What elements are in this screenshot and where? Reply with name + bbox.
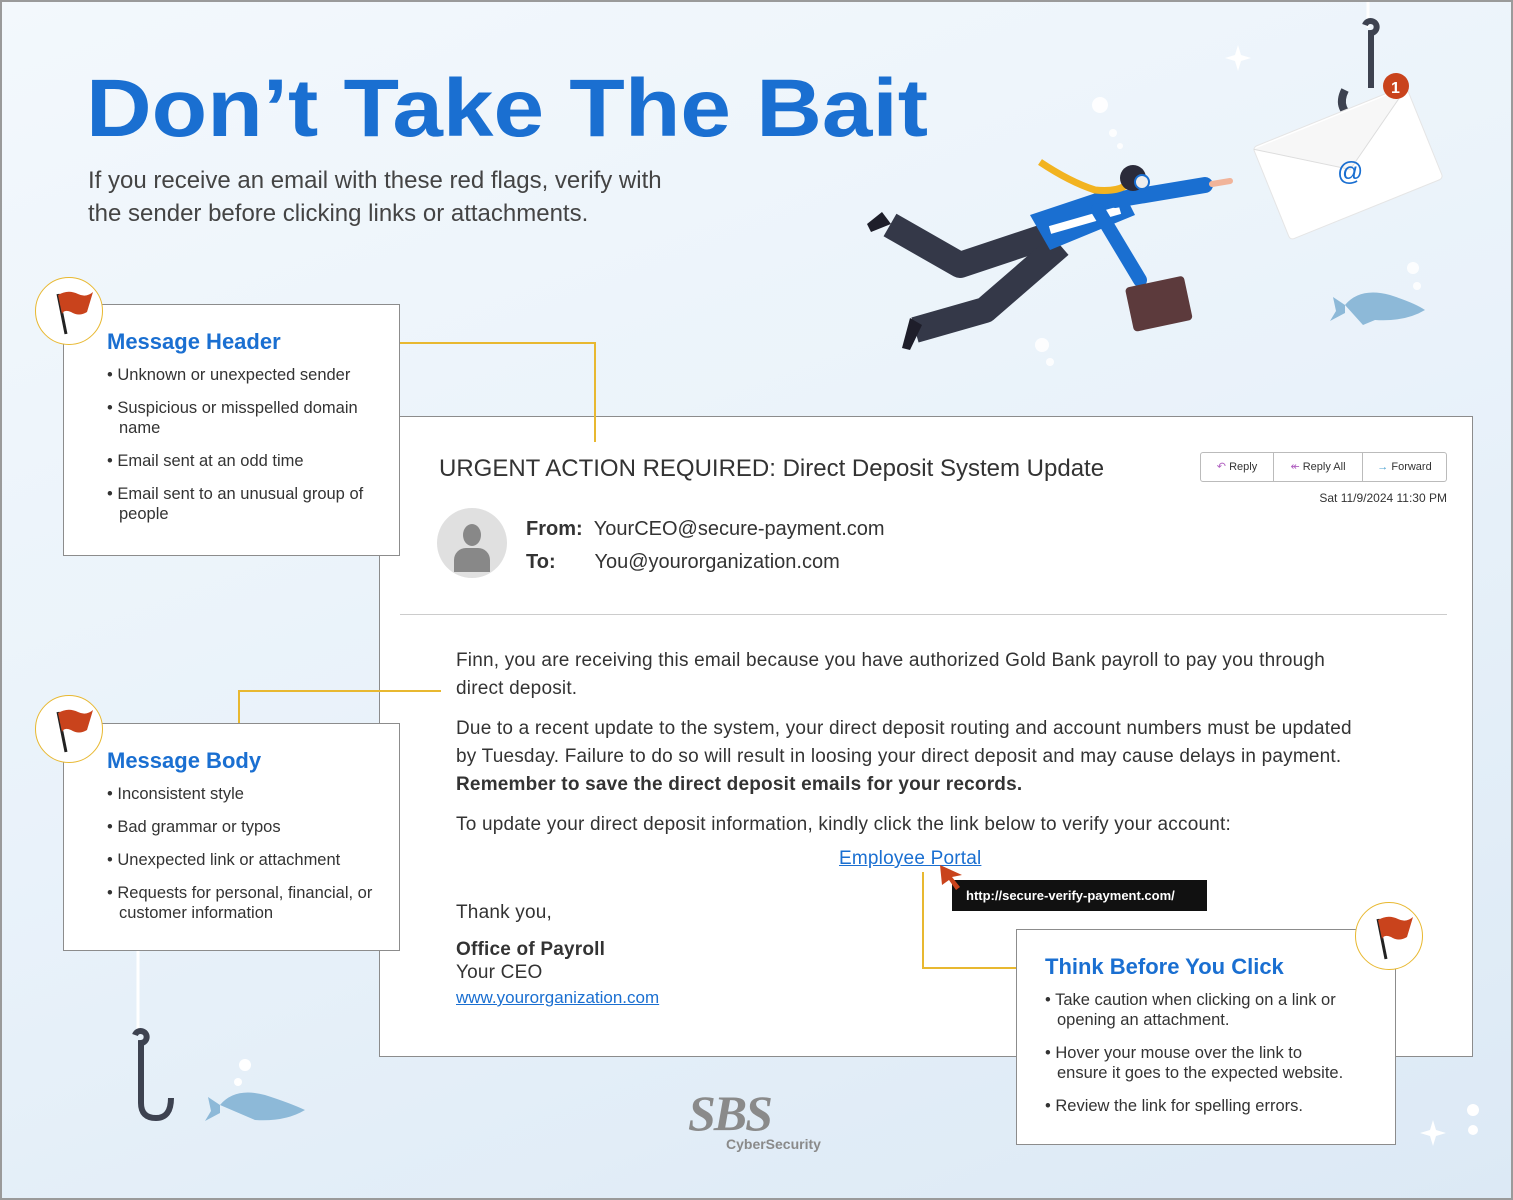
illustration: diver and hooked email: @ bbox=[1337, 156, 1363, 186]
panel: message header: Suspicious or misspelled domain name bbox=[117, 399, 358, 437]
icon: flag think bbox=[1355, 902, 1423, 970]
icon: cursor bbox=[940, 865, 962, 890]
panel: think before you click: Hover your mouse over the link to ensure it goes to the expected website. bbox=[1055, 1044, 1343, 1082]
panel: message header: Message Header bbox=[107, 329, 281, 354]
from/to bbox=[526, 518, 885, 573]
signature: Thank you, bbox=[456, 902, 552, 923]
subtitle: the sender before clicking links or attachments. bbox=[88, 200, 588, 227]
reply buttons: → Forward bbox=[1377, 461, 1432, 473]
signature: Office of Payroll bbox=[456, 939, 605, 960]
reply buttons bbox=[1200, 452, 1447, 482]
icon: avatar bbox=[437, 508, 507, 578]
reply buttons: ↞ Reply All bbox=[1290, 461, 1346, 473]
email subject: URGENT ACTION REQUIRED: Direct Deposit System Update bbox=[439, 455, 1104, 482]
signature bbox=[456, 902, 605, 960]
tooltip url bbox=[952, 880, 1207, 911]
panel: think before you click bbox=[1016, 929, 1396, 1145]
decorative sparkles bbox=[1420, 1104, 1479, 1146]
panel: email: Due to a recent update to the system, your direct deposit routing and account numbers must be updated by Tuesday. Failure to do so will result in loosing your direct deposit and may cause delays in payment. Remember to save the direct deposit emails for your records. bbox=[456, 718, 1352, 795]
reply buttons: ↶ Reply bbox=[1217, 461, 1257, 473]
panel: message body bbox=[63, 723, 400, 951]
panel: message body: Unexpected link or attachment bbox=[117, 851, 340, 869]
panel: think before you click: Review the link for spelling errors. bbox=[1055, 1097, 1303, 1115]
email body: Finn, you are receiving this email because you have authorized Gold Bank payroll to pay you through direct deposit. bbox=[456, 650, 1325, 699]
logo: SBS bbox=[688, 1085, 771, 1141]
illustration: diver and hooked email: 1 bbox=[1391, 80, 1400, 97]
panel: think before you click: Think Before You Click bbox=[1045, 954, 1284, 979]
logo bbox=[688, 1085, 821, 1152]
from/to: From: YourCEO@secure-payment.com bbox=[526, 518, 885, 540]
logo: CyberSecurity bbox=[726, 1136, 821, 1152]
panel: email: Your CEO bbox=[456, 962, 542, 983]
panel: message body: Requests for personal, financial, or customer information bbox=[117, 884, 372, 922]
link: Employee Portal bbox=[839, 848, 981, 869]
icon: flag header bbox=[35, 277, 103, 345]
panel: message header: Unknown or unexpected sender bbox=[117, 366, 350, 384]
panel: think before you click: Take caution when clicking on a link or opening an attachment. bbox=[1055, 991, 1336, 1029]
panel: message header: Email sent to an unusual group of people bbox=[117, 485, 363, 523]
panel: message body: Bad grammar or typos bbox=[117, 818, 281, 836]
subtitle bbox=[88, 167, 662, 227]
illustration: bottom hook and fish bbox=[132, 951, 305, 1121]
illustration: diver and hooked email bbox=[867, 2, 1442, 366]
tooltip url: http://secure-verify-payment.com/ bbox=[966, 888, 1175, 903]
connectors bbox=[399, 342, 595, 344]
from/to: To: You@yourorganization.com bbox=[526, 551, 840, 573]
panel: email bbox=[379, 416, 1473, 1057]
panel: email: To update your direct deposit information, kindly click the link below to verify your account: bbox=[456, 814, 1231, 835]
timestamp: Sat 11/9/2024 11:30 PM bbox=[1319, 491, 1447, 505]
panel: message header: Email sent at an odd time bbox=[117, 452, 304, 470]
subtitle: If you receive an email with these red flags, verify with bbox=[88, 167, 662, 194]
icon: flag body bbox=[35, 695, 103, 763]
title: Don’t Take The Bait bbox=[86, 63, 928, 154]
panel: message body: Inconsistent style bbox=[117, 785, 244, 803]
panel: email: www.yourorganization.com bbox=[456, 988, 659, 1007]
panel: message body: Message Body bbox=[107, 748, 261, 773]
panel: message header bbox=[63, 304, 400, 556]
